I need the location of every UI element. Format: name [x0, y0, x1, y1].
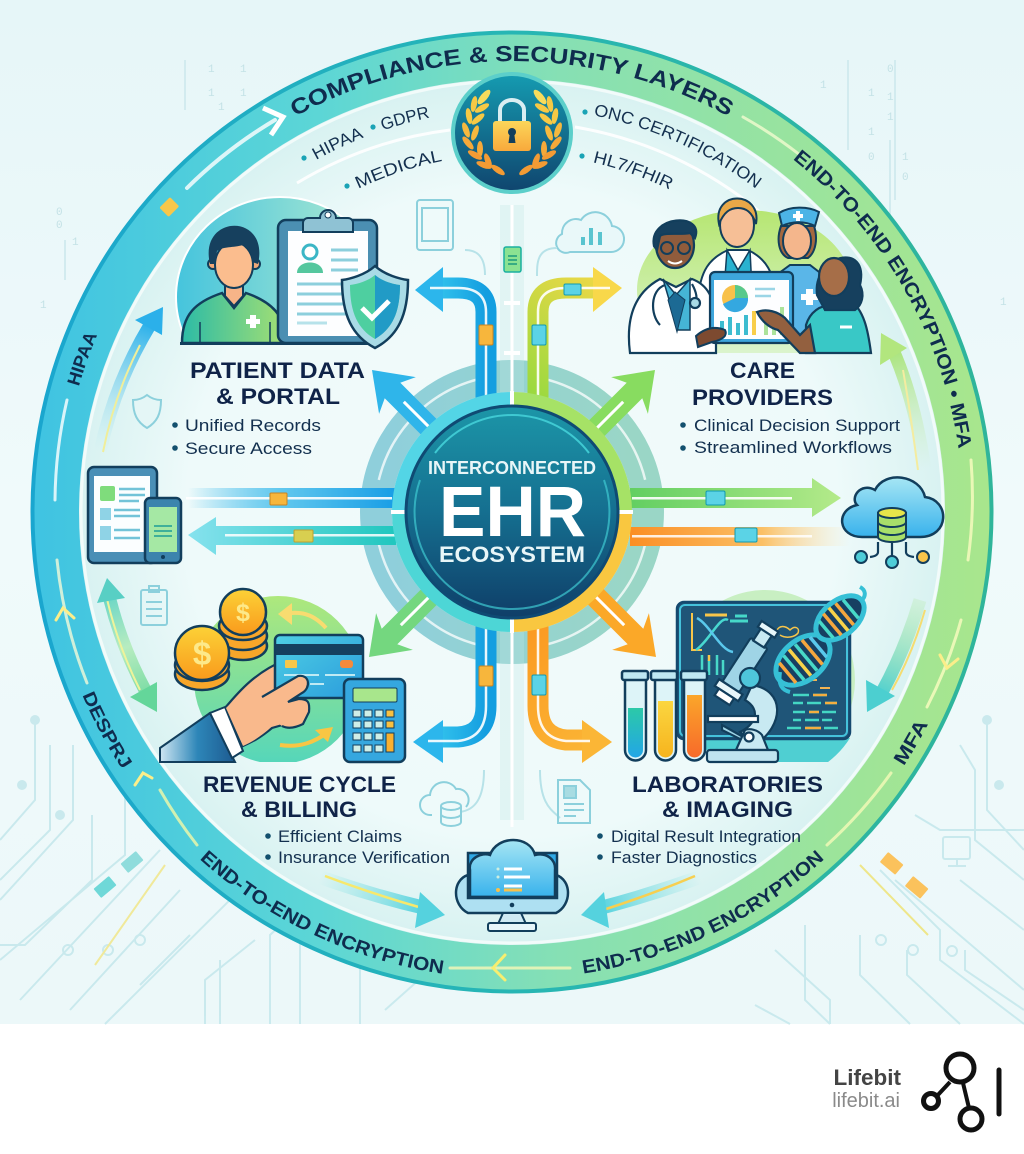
- bullets: Digital Result Integration: [611, 827, 801, 846]
- small chips in circuit pattern: [93, 851, 929, 965]
- pale icon: document: [558, 780, 590, 823]
- circuit pattern: lower right: [755, 716, 1024, 1024]
- binary digit columns: 1: [1000, 297, 1007, 309]
- heading: & BILLING: [241, 797, 357, 822]
- arrow: diagonal orange: [570, 571, 674, 675]
- laurel: [460, 88, 564, 177]
- bullets: [597, 827, 801, 867]
- screen graphs: [692, 613, 838, 728]
- pale icon: cloud database: [420, 782, 469, 826]
- nurse B: [757, 257, 871, 353]
- bullets: Faster Diagnostics: [611, 848, 757, 867]
- central hub: [391, 391, 633, 633]
- icon: payment: $: [193, 635, 211, 672]
- icon: clinical team: [629, 198, 871, 370]
- hub outer halo: [375, 375, 649, 649]
- panel: laboratories and imaging: [597, 587, 872, 867]
- binary digit columns: 1: [240, 88, 247, 100]
- binary digit columns: 1: [72, 237, 79, 249]
- test tubes: [622, 671, 707, 760]
- binary digit columns: 1: [820, 80, 827, 92]
- ring text: end-to-end encryption lower right: END-TO-END ENCRYPTION: [582, 850, 824, 974]
- icon: lab equipment: [622, 587, 872, 780]
- arrow: left blue data band: [186, 488, 396, 508]
- standards list: MEDICAL: [354, 151, 442, 188]
- hub title: INTERCONNECTED: [428, 457, 596, 478]
- panel: care providers: [629, 198, 900, 457]
- clipboard: [278, 220, 377, 343]
- binary digit columns: [40, 60, 1007, 312]
- heading: [190, 358, 365, 409]
- ring arrow: top left: [263, 108, 283, 135]
- bullets: Streamlined Workflows: [694, 438, 892, 457]
- ring text: compliance & security layers: COMPLIANCE & SECURITY LAYERS: [292, 46, 733, 114]
- heading: PATIENT DATA: [190, 358, 365, 383]
- icon: patient with record: [175, 196, 410, 350]
- arrow: bent blue to revenue cycle: [413, 626, 493, 763]
- binary digit columns: 1: [868, 88, 875, 100]
- pale icon: tablet: [417, 200, 453, 250]
- icon: payment: $: [236, 599, 250, 627]
- arrow: bent yellow-green to care providers: [532, 267, 622, 398]
- hub disc: [406, 406, 618, 618]
- hand back behind card: [225, 660, 300, 746]
- pale icon: shield: [133, 395, 161, 428]
- bullets: [172, 416, 321, 458]
- sleeve: [160, 713, 235, 762]
- coin stacks: [175, 589, 267, 690]
- heading: LABORATORIES: [632, 772, 823, 797]
- icon: cloud monitor: [456, 840, 568, 931]
- ring streaks: [55, 117, 972, 968]
- standard bullets: [301, 109, 588, 189]
- standards list: [301, 105, 762, 190]
- panel: patient data and portal: [172, 197, 408, 458]
- bullets: Secure Access: [185, 439, 312, 458]
- arrow: right orange: [630, 527, 852, 546]
- ring chevrons: [56, 608, 958, 980]
- microscope: [707, 619, 782, 762]
- pale icon: clipboard: [141, 586, 167, 625]
- binary digit columns: 1: [208, 64, 215, 76]
- heading: [632, 772, 823, 822]
- DNA helix: [766, 587, 872, 695]
- bullets: Insurance Verification: [278, 848, 450, 867]
- arrow: right green: [630, 478, 841, 517]
- nurse A: [775, 208, 832, 340]
- arrow: inner right lower: [866, 600, 925, 712]
- bullets: [680, 416, 900, 457]
- data file chip: [504, 247, 521, 272]
- heading: & IMAGING: [662, 797, 793, 822]
- heading: & PORTAL: [216, 384, 340, 409]
- outer compliance ring: [32, 32, 992, 992]
- icon: payment: [160, 589, 405, 764]
- heading: [692, 358, 833, 410]
- arrow: diagonal green: [569, 352, 673, 456]
- ring text: end-to-end encryption lower left: END-TO-END ENCRYPTION: [200, 850, 444, 974]
- standards list: ONC CERTIFICATION: [595, 105, 762, 188]
- standards list: HL7/FHIR: [594, 151, 672, 190]
- ring text: MFA lower right: MFA: [894, 724, 928, 765]
- binary digit columns: 1: [40, 300, 47, 312]
- ring text: HIPAA left: HIPAA: [67, 334, 97, 386]
- footer: Lifebit logo text: [832, 1065, 901, 1112]
- binary digit columns: 1: [240, 64, 247, 76]
- binary digit columns: 0: [887, 64, 894, 76]
- binary digit columns: 0: [902, 172, 909, 184]
- hub title: [428, 457, 596, 567]
- binary digit columns: 1: [887, 92, 894, 104]
- hub title: EHR: [439, 473, 586, 552]
- bullets: [265, 827, 450, 867]
- arrow: bent orange to laboratories: [532, 626, 612, 763]
- bullets: Unified Records: [185, 416, 321, 435]
- binary digit columns: 1: [902, 152, 909, 164]
- circuit pattern: lower left: [0, 716, 430, 1024]
- ring text: end-to-end encryption and MFA right: END-TO-END ENCRYPTION • MFA: [794, 150, 971, 448]
- heading: [203, 772, 396, 822]
- arrow: inner right upper: [880, 333, 925, 470]
- tablet: [710, 272, 793, 343]
- heading: CARE: [730, 358, 795, 383]
- footer: Lifebit logo text: Lifebit: [834, 1065, 901, 1090]
- footer: Lifebit logo mark: [924, 1054, 999, 1130]
- binary digit columns: 0: [56, 207, 63, 219]
- heading: PROVIDERS: [692, 385, 833, 410]
- icon: padlock medallion: [451, 72, 573, 194]
- ring text: lower left label: DESPRJ: [82, 691, 132, 767]
- pale connector lines top: [460, 248, 560, 818]
- panel: revenue cycle and billing: [160, 589, 450, 867]
- binary digit columns: 1: [208, 88, 215, 100]
- arrow: diagonal blue: [354, 352, 458, 456]
- pale icon: cloud chart: [556, 212, 624, 253]
- bullets: Efficient Claims: [278, 827, 402, 846]
- shield: [342, 266, 408, 348]
- central vertical data bus: [500, 205, 524, 827]
- arrow: diagonal green lower left: [351, 571, 455, 675]
- ring chip: [159, 197, 179, 217]
- doctor A: [629, 220, 716, 353]
- hub colored ring: [399, 399, 625, 625]
- inner white arcs behind standards: [297, 127, 760, 212]
- binary digit columns: 0: [868, 152, 875, 164]
- doctor hand: [696, 328, 726, 347]
- icon: tablet and phone: [88, 467, 181, 563]
- arrow: inner lower left: [320, 876, 445, 928]
- card: [275, 635, 363, 698]
- arrow: left teal return: [188, 517, 396, 555]
- arrow: inner blue left: [100, 307, 163, 452]
- arrow: inner green two-way left: [97, 578, 157, 712]
- bullets: Clinical Decision Support: [694, 416, 900, 435]
- monitor: [677, 602, 850, 739]
- binary digit columns: 1: [218, 102, 225, 114]
- hub title: ECOSYSTEM: [439, 542, 585, 567]
- heading: REVENUE CYCLE: [203, 772, 396, 797]
- thumb and fingers: [226, 676, 309, 746]
- footer: Lifebit logo text: lifebit.ai: [832, 1090, 900, 1112]
- binary digit columns: 1: [868, 127, 875, 139]
- binary digit columns: 1: [887, 112, 894, 124]
- doctor B: [698, 198, 776, 340]
- standards list: HIPAA: [312, 128, 364, 160]
- icon: cloud database: [842, 477, 943, 568]
- arrow: bent blue to patient portal: [415, 267, 493, 398]
- calculator: [344, 679, 405, 762]
- arrow: inner lower right: [581, 876, 700, 928]
- binary digit columns: 0: [56, 220, 63, 232]
- standards list: GDPR: [381, 107, 430, 129]
